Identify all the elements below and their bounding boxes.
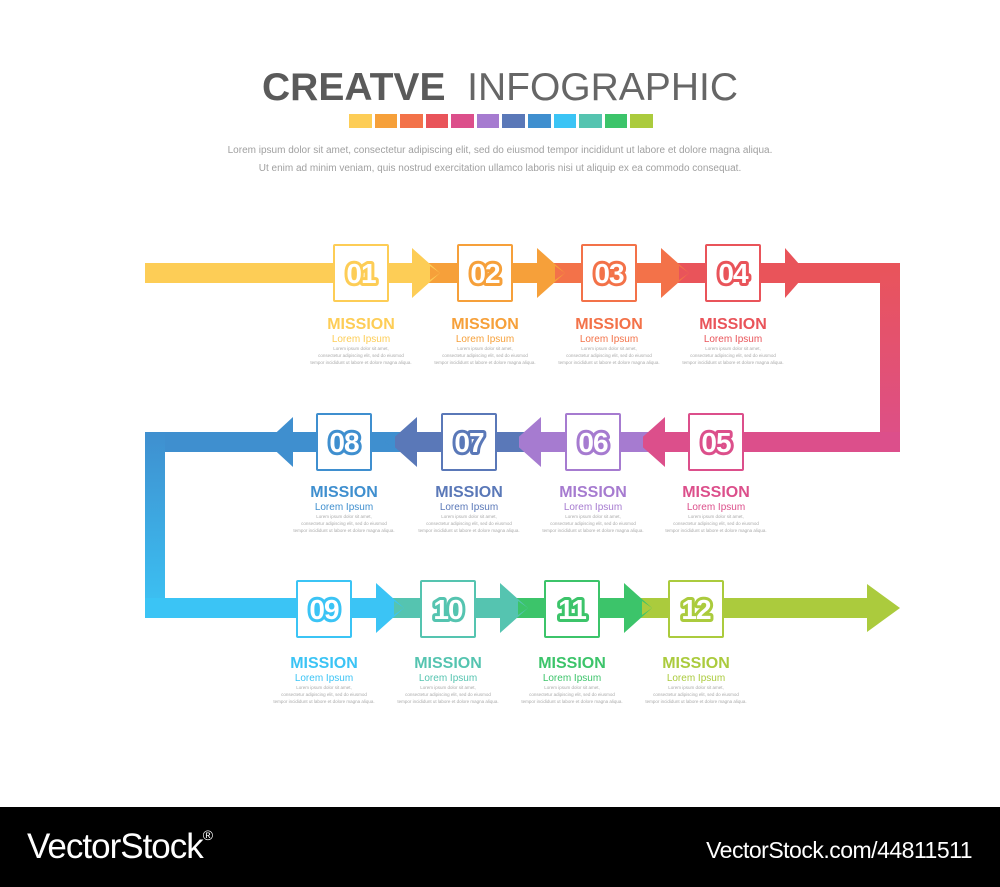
label 03: MISSION	[575, 316, 643, 333]
label 06: tempor incididunt ut labore et dolore magna aliqua.	[542, 528, 644, 533]
subtitle text	[228, 145, 772, 174]
label 10: Lorem ipsum dolor sit amet,	[420, 685, 476, 690]
label 05: consectetur adipiscing elit, sed do eiusmod	[673, 521, 759, 526]
label 01: Lorem ipsum dolor sit amet,	[333, 346, 389, 351]
label 11: consectetur adipiscing elit, sed do eiusmod	[529, 692, 615, 697]
label 10: tempor incididunt ut labore et dolore magna aliqua.	[397, 699, 499, 704]
label 11: tempor incididunt ut labore et dolore magna aliqua.	[521, 699, 623, 704]
label 05: Lorem Ipsum	[687, 502, 745, 513]
label 10: consectetur adipiscing elit, sed do eiusmod	[405, 692, 491, 697]
box 05: 05	[701, 427, 731, 458]
label 04: MISSION	[699, 316, 767, 333]
box 09	[298, 582, 350, 636]
label 02: Lorem Ipsum	[456, 334, 514, 345]
box 06	[567, 415, 619, 469]
right vertical connector	[880, 263, 900, 452]
label 08: consectetur adipiscing elit, sed do eiusmod	[301, 521, 387, 526]
label 08: tempor incididunt ut labore et dolore magna aliqua.	[293, 528, 395, 533]
box 01: 01	[346, 258, 376, 289]
row 3 bands and arrows	[145, 583, 900, 633]
footer bar	[0, 807, 1000, 887]
label 02: Lorem ipsum dolor sit amet,	[457, 346, 513, 351]
box 02: 02	[470, 258, 500, 289]
box 06: 06	[578, 427, 608, 458]
label 12: Lorem Ipsum	[667, 673, 725, 684]
label 12: MISSION	[662, 655, 730, 672]
label 08: MISSION	[310, 484, 378, 501]
left vertical connector	[145, 432, 165, 618]
label 09: MISSION	[290, 655, 358, 672]
label 02: tempor incididunt ut labore et dolore magna aliqua.	[434, 360, 536, 365]
label 11: Lorem Ipsum	[543, 673, 601, 684]
label 04: Lorem ipsum dolor sit amet,	[705, 346, 761, 351]
color legend bar	[349, 114, 653, 128]
box 11: 11	[558, 594, 586, 625]
label 01: tempor incididunt ut labore et dolore magna aliqua.	[310, 360, 412, 365]
label 06: MISSION	[559, 484, 627, 501]
label 05: tempor incididunt ut labore et dolore magna aliqua.	[665, 528, 767, 533]
box 10	[422, 582, 474, 636]
label 04	[682, 316, 784, 365]
label 08: Lorem Ipsum	[315, 502, 373, 513]
label 12	[645, 655, 747, 704]
box 03	[583, 246, 635, 300]
box 05	[690, 415, 742, 469]
label 07: Lorem ipsum dolor sit amet,	[441, 514, 497, 519]
label 12: Lorem ipsum dolor sit amet,	[668, 685, 724, 690]
box 01	[335, 246, 387, 300]
row 2 bands and arrows	[145, 417, 900, 467]
box 07: 07	[454, 427, 484, 458]
label 03: consectetur adipiscing elit, sed do eiusmod	[566, 353, 652, 358]
title: CREATVE INFOGRAPHIC	[262, 66, 738, 109]
box 08: 08	[329, 427, 359, 458]
label 01: Lorem Ipsum	[332, 334, 390, 345]
label 09: tempor incididunt ut labore et dolore magna aliqua.	[273, 699, 375, 704]
label 06: Lorem ipsum dolor sit amet,	[565, 514, 621, 519]
label 07: consectetur adipiscing elit, sed do eiusmod	[426, 521, 512, 526]
label 11	[521, 655, 623, 704]
footer logo: VectorStock®	[27, 827, 212, 866]
label 03: Lorem ipsum dolor sit amet,	[581, 346, 637, 351]
label 04: tempor incididunt ut labore et dolore magna aliqua.	[682, 360, 784, 365]
label 01: consectetur adipiscing elit, sed do eiusmod	[318, 353, 404, 358]
label 03	[558, 316, 660, 365]
label 12: tempor incididunt ut labore et dolore magna aliqua.	[645, 699, 747, 704]
label 10: Lorem Ipsum	[419, 673, 477, 684]
box 04: 04	[718, 258, 749, 289]
label 06	[542, 484, 644, 533]
box 11	[546, 582, 598, 636]
box 09: 09	[309, 594, 339, 625]
label 06: consectetur adipiscing elit, sed do eiusmod	[550, 521, 636, 526]
label 05: MISSION	[682, 484, 750, 501]
label 04: Lorem Ipsum	[704, 334, 762, 345]
box 10: 10	[433, 594, 463, 625]
box 03: 03	[594, 258, 624, 289]
label 08	[293, 484, 395, 533]
label 11: Lorem ipsum dolor sit amet,	[544, 685, 600, 690]
label 10	[397, 655, 499, 704]
box 02	[459, 246, 511, 300]
label 02	[434, 316, 536, 365]
box 12	[670, 582, 722, 636]
label 01: MISSION	[327, 316, 395, 333]
footer url: VectorStock.com/44811511	[706, 837, 972, 863]
label 01	[310, 316, 412, 365]
label 09: Lorem ipsum dolor sit amet,	[296, 685, 352, 690]
label 02: consectetur adipiscing elit, sed do eiusmod	[442, 353, 528, 358]
subtitle text: Lorem ipsum dolor sit amet, consectetur adipiscing elit, sed do eiusmod tempor incididunt ut labore et dolore magna aliqua.	[228, 145, 772, 156]
subtitle text: Ut enim ad minim veniam, quis nostrud exercitation ullamco laboris nisi ut aliquip ex ea commodo consequat.	[259, 163, 741, 174]
label 11: MISSION	[538, 655, 606, 672]
label 02: MISSION	[451, 316, 519, 333]
label 07: Lorem Ipsum	[440, 502, 498, 513]
label 07: MISSION	[435, 484, 503, 501]
label 03: Lorem Ipsum	[580, 334, 638, 345]
label 05	[665, 484, 767, 533]
label 07	[418, 484, 520, 533]
row 1 bands and arrows	[145, 248, 900, 298]
label 12: consectetur adipiscing elit, sed do eiusmod	[653, 692, 739, 697]
label 09	[273, 655, 375, 704]
label 03: tempor incididunt ut labore et dolore magna aliqua.	[558, 360, 660, 365]
label 10: MISSION	[414, 655, 482, 672]
label 04: consectetur adipiscing elit, sed do eiusmod	[690, 353, 776, 358]
box 07	[443, 415, 495, 469]
label 06: Lorem Ipsum	[564, 502, 622, 513]
label 09: consectetur adipiscing elit, sed do eiusmod	[281, 692, 367, 697]
label 08: Lorem ipsum dolor sit amet,	[316, 514, 372, 519]
box 12: 12	[681, 594, 711, 625]
label 09: Lorem Ipsum	[295, 673, 353, 684]
box 08	[318, 415, 370, 469]
label 07: tempor incididunt ut labore et dolore magna aliqua.	[418, 528, 520, 533]
label 05: Lorem ipsum dolor sit amet,	[688, 514, 744, 519]
box 04	[707, 246, 759, 300]
